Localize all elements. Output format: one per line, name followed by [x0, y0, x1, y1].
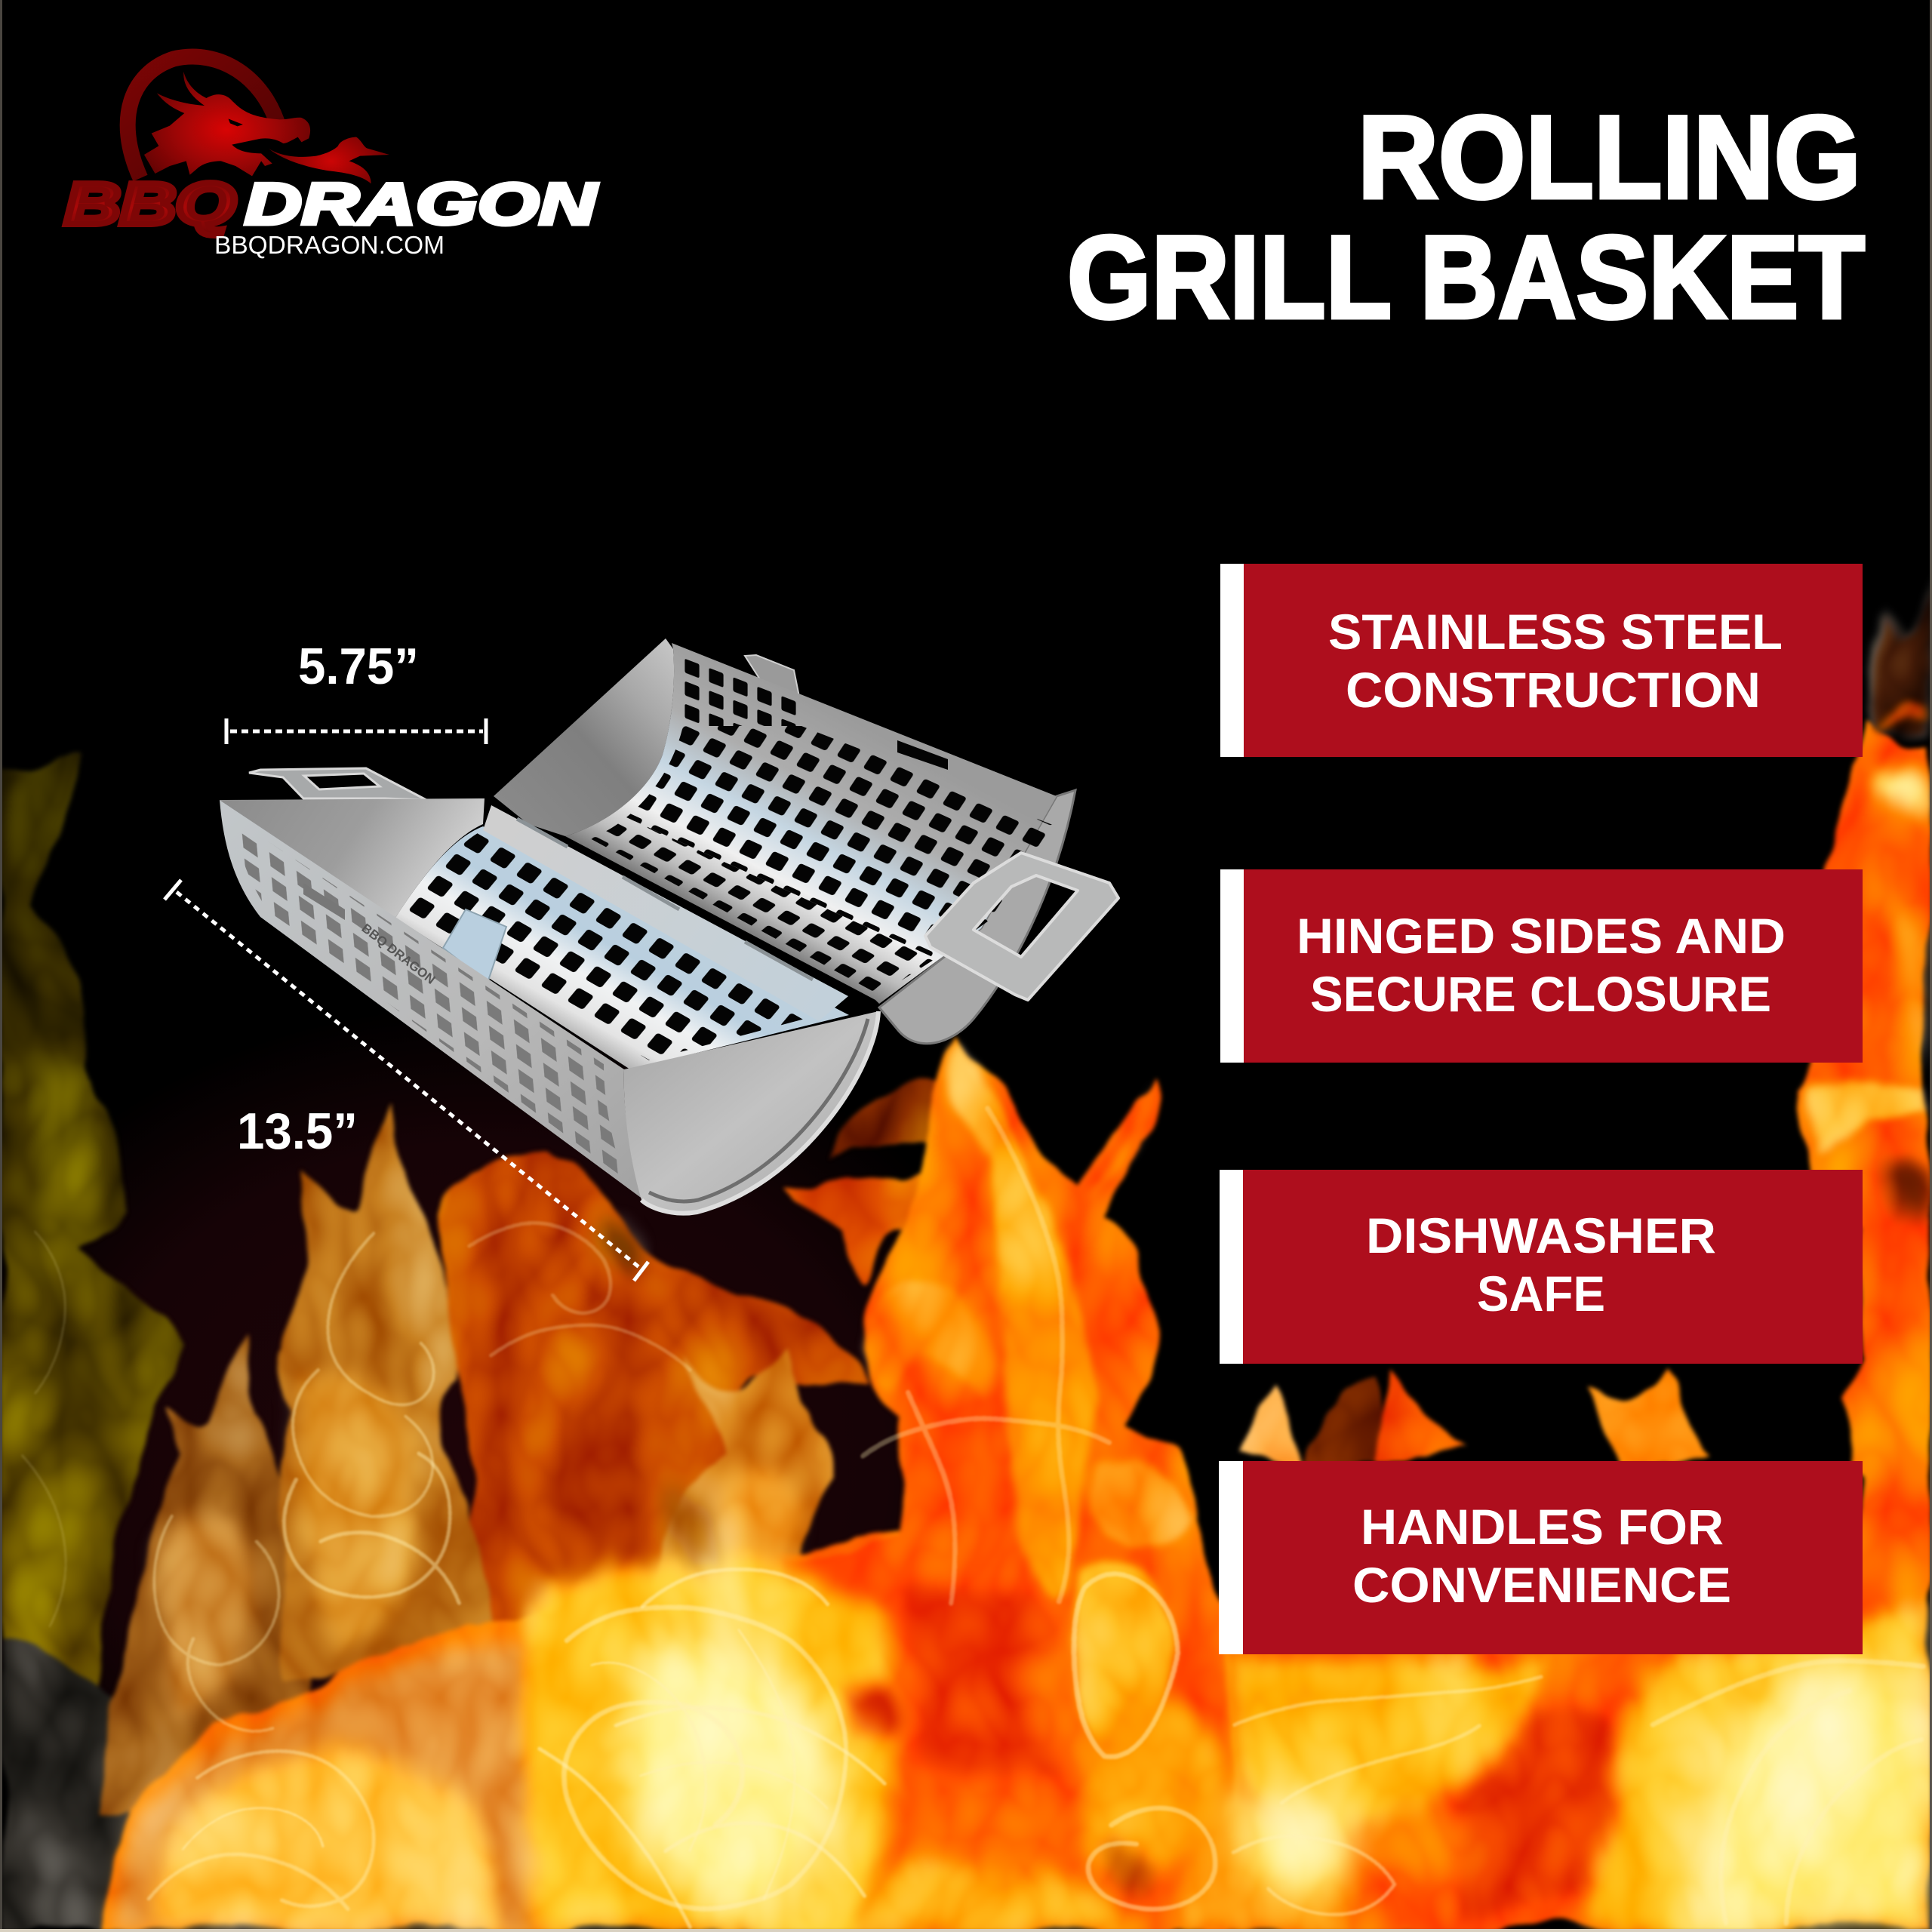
flame: lower yellow ring [1075, 1568, 1177, 1758]
thin light edge [0, 0, 2, 1932]
flame: pale yellow zones [524, 1553, 893, 1932]
logo: BBQ Dragon [65, 57, 598, 259]
title [1067, 92, 1865, 343]
logo dragon flame [269, 137, 389, 183]
front face rim [649, 1019, 868, 1201]
flame: orange mass [435, 1140, 860, 1652]
dimension: length 13.5 [165, 880, 648, 1281]
flames: fire background [0, 580, 1932, 1932]
logo BBQ wordmark: BBQ [65, 171, 235, 237]
back mesh holes upper [679, 657, 800, 726]
panel: stainless steel: CONSTRUCTION [1346, 662, 1761, 718]
logo dragon head [144, 72, 310, 176]
flame: central highlight streak [986, 1097, 1088, 1603]
flame: dim olive left [0, 757, 177, 1683]
outer side shell [220, 800, 646, 1201]
basket brand: BBQ DRAGON [359, 921, 438, 987]
outer side holes [234, 819, 623, 1177]
flame: right lobes [1091, 1455, 1202, 1552]
flame: deep orange bottom zones [1455, 1705, 1640, 1924]
panel: stainless steel: STAINLESS STEEL [1328, 604, 1783, 660]
product: grill basket [220, 638, 1118, 1214]
panel: handles [1219, 1461, 1863, 1654]
flame: orange between panels [1370, 1375, 1472, 1460]
panel: stainless steel [1220, 564, 1863, 757]
front face [624, 1011, 878, 1214]
logo url: BBQDRAGON.COM [214, 231, 445, 259]
flame: dark pockets [592, 1214, 636, 1270]
panel: dishwasher safe [1220, 1170, 1863, 1364]
front end plate [220, 798, 485, 918]
back mesh [565, 643, 1057, 1004]
hinge strip [483, 805, 848, 1021]
flame: dim between panels [1297, 1381, 1393, 1460]
front mesh holes [408, 830, 819, 1060]
panel: hinged sides: HINGED SIDES AND [1297, 908, 1786, 964]
flame: bottom base [93, 1529, 1932, 1932]
back mesh holes middle [626, 726, 1057, 958]
flame: grey corner [0, 1640, 189, 1932]
flame: upper right dim [1869, 580, 1932, 740]
flame: upper right wisp [1874, 699, 1932, 730]
flame: small pale between panels [1247, 1376, 1297, 1460]
flame: upper tip highlight [941, 1041, 1029, 1166]
back rim slot [897, 740, 948, 770]
flame: pale between panels right [1598, 1362, 1718, 1460]
logo dragon eye [228, 118, 243, 126]
flame: left wing [778, 1171, 922, 1287]
title: ROLLING [1358, 92, 1861, 223]
background ember glow [0, 1004, 1057, 1932]
panel: hinged sides [1220, 869, 1863, 1063]
back mesh holes lower [589, 817, 936, 995]
flame: column B [278, 1101, 498, 1677]
back end plate [494, 638, 674, 836]
flame: column D [650, 1346, 826, 1627]
flame: column A [105, 1335, 303, 1813]
flame: big central [789, 1035, 1227, 1932]
hinge knuckles [517, 819, 813, 980]
back clip [745, 655, 800, 700]
logo DRAGON wordmark: DRAGON [245, 171, 598, 237]
outer side slot [303, 883, 345, 920]
right handle [925, 853, 1118, 1000]
flame wisps [25, 1109, 1924, 1924]
flame: central ball [856, 1281, 996, 1407]
front mesh [395, 826, 849, 1069]
panel: dishwasher safe: SAFE [1477, 1266, 1605, 1321]
back shell [879, 790, 1075, 1044]
closure clip [443, 909, 506, 983]
flame: bottom left tan [105, 1627, 555, 1932]
flame: tan column highlights [298, 1368, 420, 1652]
flame: right column [1233, 716, 1932, 1932]
dimension: width 5.75: 5.75” [298, 638, 419, 695]
panel: hinged sides: SECURE CLOSURE [1310, 966, 1771, 1022]
panel: handles: HANDLES FOR [1361, 1499, 1724, 1555]
left handle [249, 768, 426, 800]
flame: white-hot zones [617, 1635, 838, 1924]
dimension: length 13.5: 13.5” [237, 1103, 358, 1160]
panel: dishwasher safe: DISHWASHER [1366, 1208, 1716, 1263]
logo ring [128, 57, 279, 178]
title: GRILL BASKET [1067, 212, 1865, 343]
flame: right tip highlight [1091, 1072, 1159, 1202]
flame: dim wisp near basket [832, 1080, 937, 1165]
panel: handles: CONVENIENCE [1352, 1557, 1731, 1613]
